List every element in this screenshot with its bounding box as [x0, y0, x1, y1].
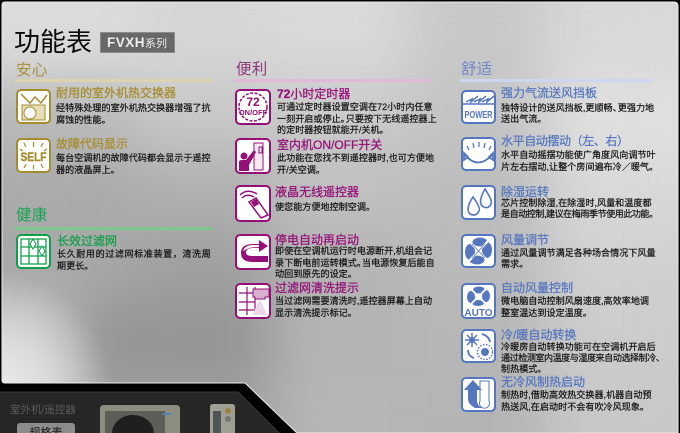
text: [277, 153, 434, 175]
feature: auto fan control: [461, 281, 649, 319]
text: 是自动控制,建议在梅雨季节使用此功能。: [501, 209, 658, 219]
heading: 长效过滤网: [57, 234, 117, 248]
dark lower-left panel: [0, 391, 300, 433]
icon: water drops: [461, 185, 496, 220]
feature: filter cleaning reminder: [235, 281, 432, 319]
heading: 除湿运转: [501, 185, 549, 199]
icon: auto fan: [461, 283, 496, 319]
icon: remote: [235, 185, 271, 222]
text: 制热时,借助高效热交换器,机器自动预: [501, 390, 652, 400]
icon: filter: [16, 234, 51, 269]
icon: self diagnosis: [16, 138, 51, 173]
text: [57, 249, 211, 271]
text: 通过检测室内温度与湿度来自动选择制冷、: [501, 353, 664, 363]
text: [275, 296, 432, 318]
heading: 健康: 健康: [16, 207, 48, 224]
text: 的定时器按钮就能开/关机。: [277, 125, 389, 135]
text: [501, 389, 652, 413]
text: 器的液晶屏上。: [56, 165, 120, 175]
text: 长久耐用的过滤网标准装置，清洗周: [57, 249, 211, 259]
text: 录下断电前运转模式。当电源恢复后能自: [275, 258, 435, 268]
text: 独特设计的送风挡板,更顺畅、更强力地: [501, 103, 654, 113]
icon: auto fan: AUTO: [464, 308, 493, 319]
text: [56, 152, 211, 175]
heading: 舒适: 舒适: [461, 61, 493, 78]
icon: cool and heat: [461, 329, 496, 363]
text: 此功能在您找不到遥控器时,也可方便地: [277, 153, 434, 163]
outdoor unit image: [100, 405, 180, 433]
text: 通过风量调节满足各种场合情况下风量: [501, 248, 656, 258]
text: 当过滤网需要清洗时,遥控器屏幕上自动: [275, 296, 432, 306]
feature: fan speed: [461, 233, 656, 269]
icon: hot start: [461, 377, 496, 412]
heading: 水平自动摆动（左、右）: [501, 134, 629, 148]
icon: switch: [235, 138, 271, 174]
text: 芯片控制除湿,在除湿时,风量和温度都: [501, 198, 652, 208]
text: 动回到原先的设定。: [275, 269, 357, 279]
feature: horizontal swing: [461, 134, 658, 172]
text: [501, 296, 649, 318]
text: 开/关空调。: [277, 165, 325, 175]
heading: 液晶无线遥控器: [275, 185, 359, 199]
text: 使您能方便地控制空调。: [275, 202, 375, 212]
heading: 便利: 便利: [236, 61, 268, 78]
feature: wireless remote: [235, 185, 375, 222]
icon: timer: [235, 89, 271, 125]
text: 制热模式。: [501, 364, 546, 374]
text: [56, 102, 211, 125]
text: [277, 102, 437, 135]
heading: 室内机ON/OFF开关: [277, 138, 382, 152]
text: 水平自动摇摆功能使广角度风向调节叶: [501, 150, 656, 160]
text: [275, 246, 435, 279]
heading: 停电自动再启动: [275, 233, 359, 247]
text: 整室温达到设定温度。: [501, 308, 592, 318]
icon: timer: ON/OFF: [239, 108, 268, 117]
text: [501, 342, 664, 375]
heading: 自动风量控制: [501, 281, 573, 295]
text: [501, 198, 658, 219]
feature: power airflow: [461, 86, 654, 124]
text: 每台空调机的故障代码都会显示于遥控: [56, 153, 211, 163]
icon: heat exchanger: [16, 89, 51, 124]
heading: 故障代码显示: [56, 137, 128, 151]
icon: self diagnosis: SELF: [20, 150, 46, 164]
heading: 冷/暖自动转换: [501, 328, 576, 342]
text: 送出气流。: [501, 114, 546, 124]
text: 即使在空调机运行时电源断开,机组会记: [275, 246, 432, 256]
text: 片左右摆动,让整个房间遍布冷／暖气。: [501, 162, 658, 172]
text: 需求。: [501, 259, 528, 269]
remote image: [210, 404, 236, 433]
text: [501, 248, 656, 269]
title: 功能表: [14, 27, 92, 57]
text: 期更长。: [57, 261, 93, 271]
heading: 耐用的室外机热交换器: [56, 86, 176, 100]
feature: auto changeover: [461, 328, 664, 374]
heading: 安心: 安心: [16, 62, 48, 79]
heading: 72小时定时器: [277, 87, 350, 101]
feature: hot start: [461, 377, 659, 413]
icon: timer: 72: [246, 95, 260, 109]
feature: long-life filter: [16, 234, 211, 271]
feature: fault code display: [16, 137, 211, 175]
button: spec table: [17, 423, 75, 433]
heading: 无冷风制热启动: [501, 375, 585, 389]
feature: auto restart: [235, 233, 435, 279]
text: 经特殊处理的室外机热交换器增强了抗: [56, 103, 211, 113]
icon: restart arrow: [235, 234, 271, 270]
text: 腐蚀的性能。: [56, 115, 111, 125]
series badge: FVXH系列: [107, 35, 167, 50]
icon: power: [461, 90, 496, 124]
heading: 强力气流送风挡板: [501, 86, 597, 100]
text: 可通过定时器设置空调在72小时内任意: [277, 102, 433, 112]
text: 热送风,在启动时不会有吹冷风现象。: [501, 402, 649, 412]
heading: 过滤网清洗提示: [275, 281, 359, 295]
text: [501, 102, 654, 124]
label: outdoor unit and remote: 室外机/遥控器: [10, 404, 76, 416]
icon: filter cleaning: [235, 283, 271, 319]
text: 显示清洗提示标记。: [275, 308, 357, 318]
text: 微电脑自动控制风扇速度,高效率地调: [501, 296, 649, 306]
feature: dehumidify: [461, 185, 658, 220]
feature: durable heat exchanger: [16, 86, 211, 125]
icon: swing: [461, 137, 496, 171]
icon: fan: [461, 234, 496, 268]
text: 一刻开启或停止。只要按下无线遥控器上: [277, 114, 437, 124]
feature: 72 hour timer: [235, 87, 437, 135]
heading: 风量调节: [501, 233, 549, 247]
text: [501, 150, 658, 172]
text: 冷暖房自动转换功能可在空调机开启后: [501, 342, 656, 352]
feature: indoor on/off switch: [235, 138, 434, 175]
series badge: [100, 32, 175, 53]
